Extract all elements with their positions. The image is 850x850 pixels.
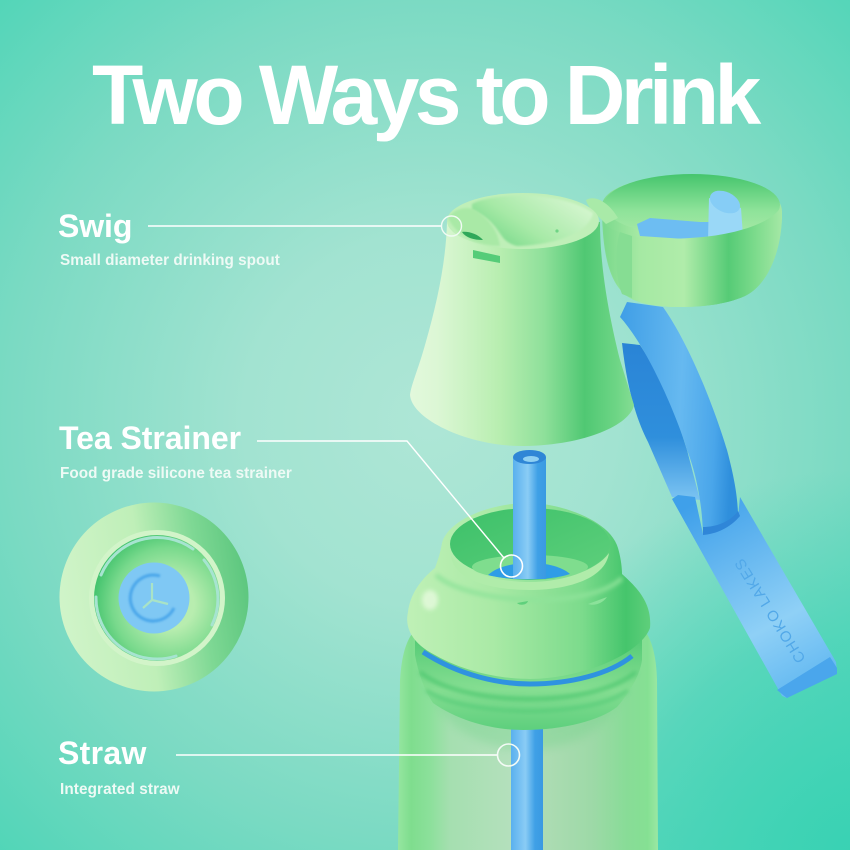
lid spout — [637, 186, 744, 240]
callout: Tea Strainer: Tea Strainer — [59, 420, 241, 456]
callout: Swig — [58, 208, 462, 269]
neck opening — [450, 508, 610, 580]
threads — [415, 640, 642, 730]
callout: Straw: Integrated straw — [60, 781, 180, 798]
collar and neck — [407, 503, 650, 679]
title: Two Ways to Drink — [92, 48, 762, 142]
callout: Straw: Straw — [58, 735, 147, 771]
callout: Swig: Small diameter drinking spout — [60, 252, 280, 269]
straw lower — [511, 715, 543, 850]
illustration: strap and tag — [620, 302, 837, 698]
illustration: cap — [410, 193, 634, 446]
inset: top-down strainer view — [60, 502, 248, 692]
cap slot — [473, 250, 500, 263]
callout: Tea Strainer — [59, 420, 522, 577]
illustration: bottle — [398, 503, 658, 850]
spout opening — [462, 232, 483, 240]
callout: Tea Strainer: Food grade silicone tea strainer — [60, 465, 292, 482]
illustration: straw top — [513, 450, 546, 579]
blue ring — [423, 652, 632, 684]
illustration: open lid — [586, 174, 782, 307]
strainer centre — [118, 562, 190, 634]
tag — [672, 495, 837, 698]
tag: CHOKO LAKES — [731, 554, 809, 666]
callout: Swig: Swig — [58, 208, 132, 244]
callout: Straw — [58, 735, 520, 798]
